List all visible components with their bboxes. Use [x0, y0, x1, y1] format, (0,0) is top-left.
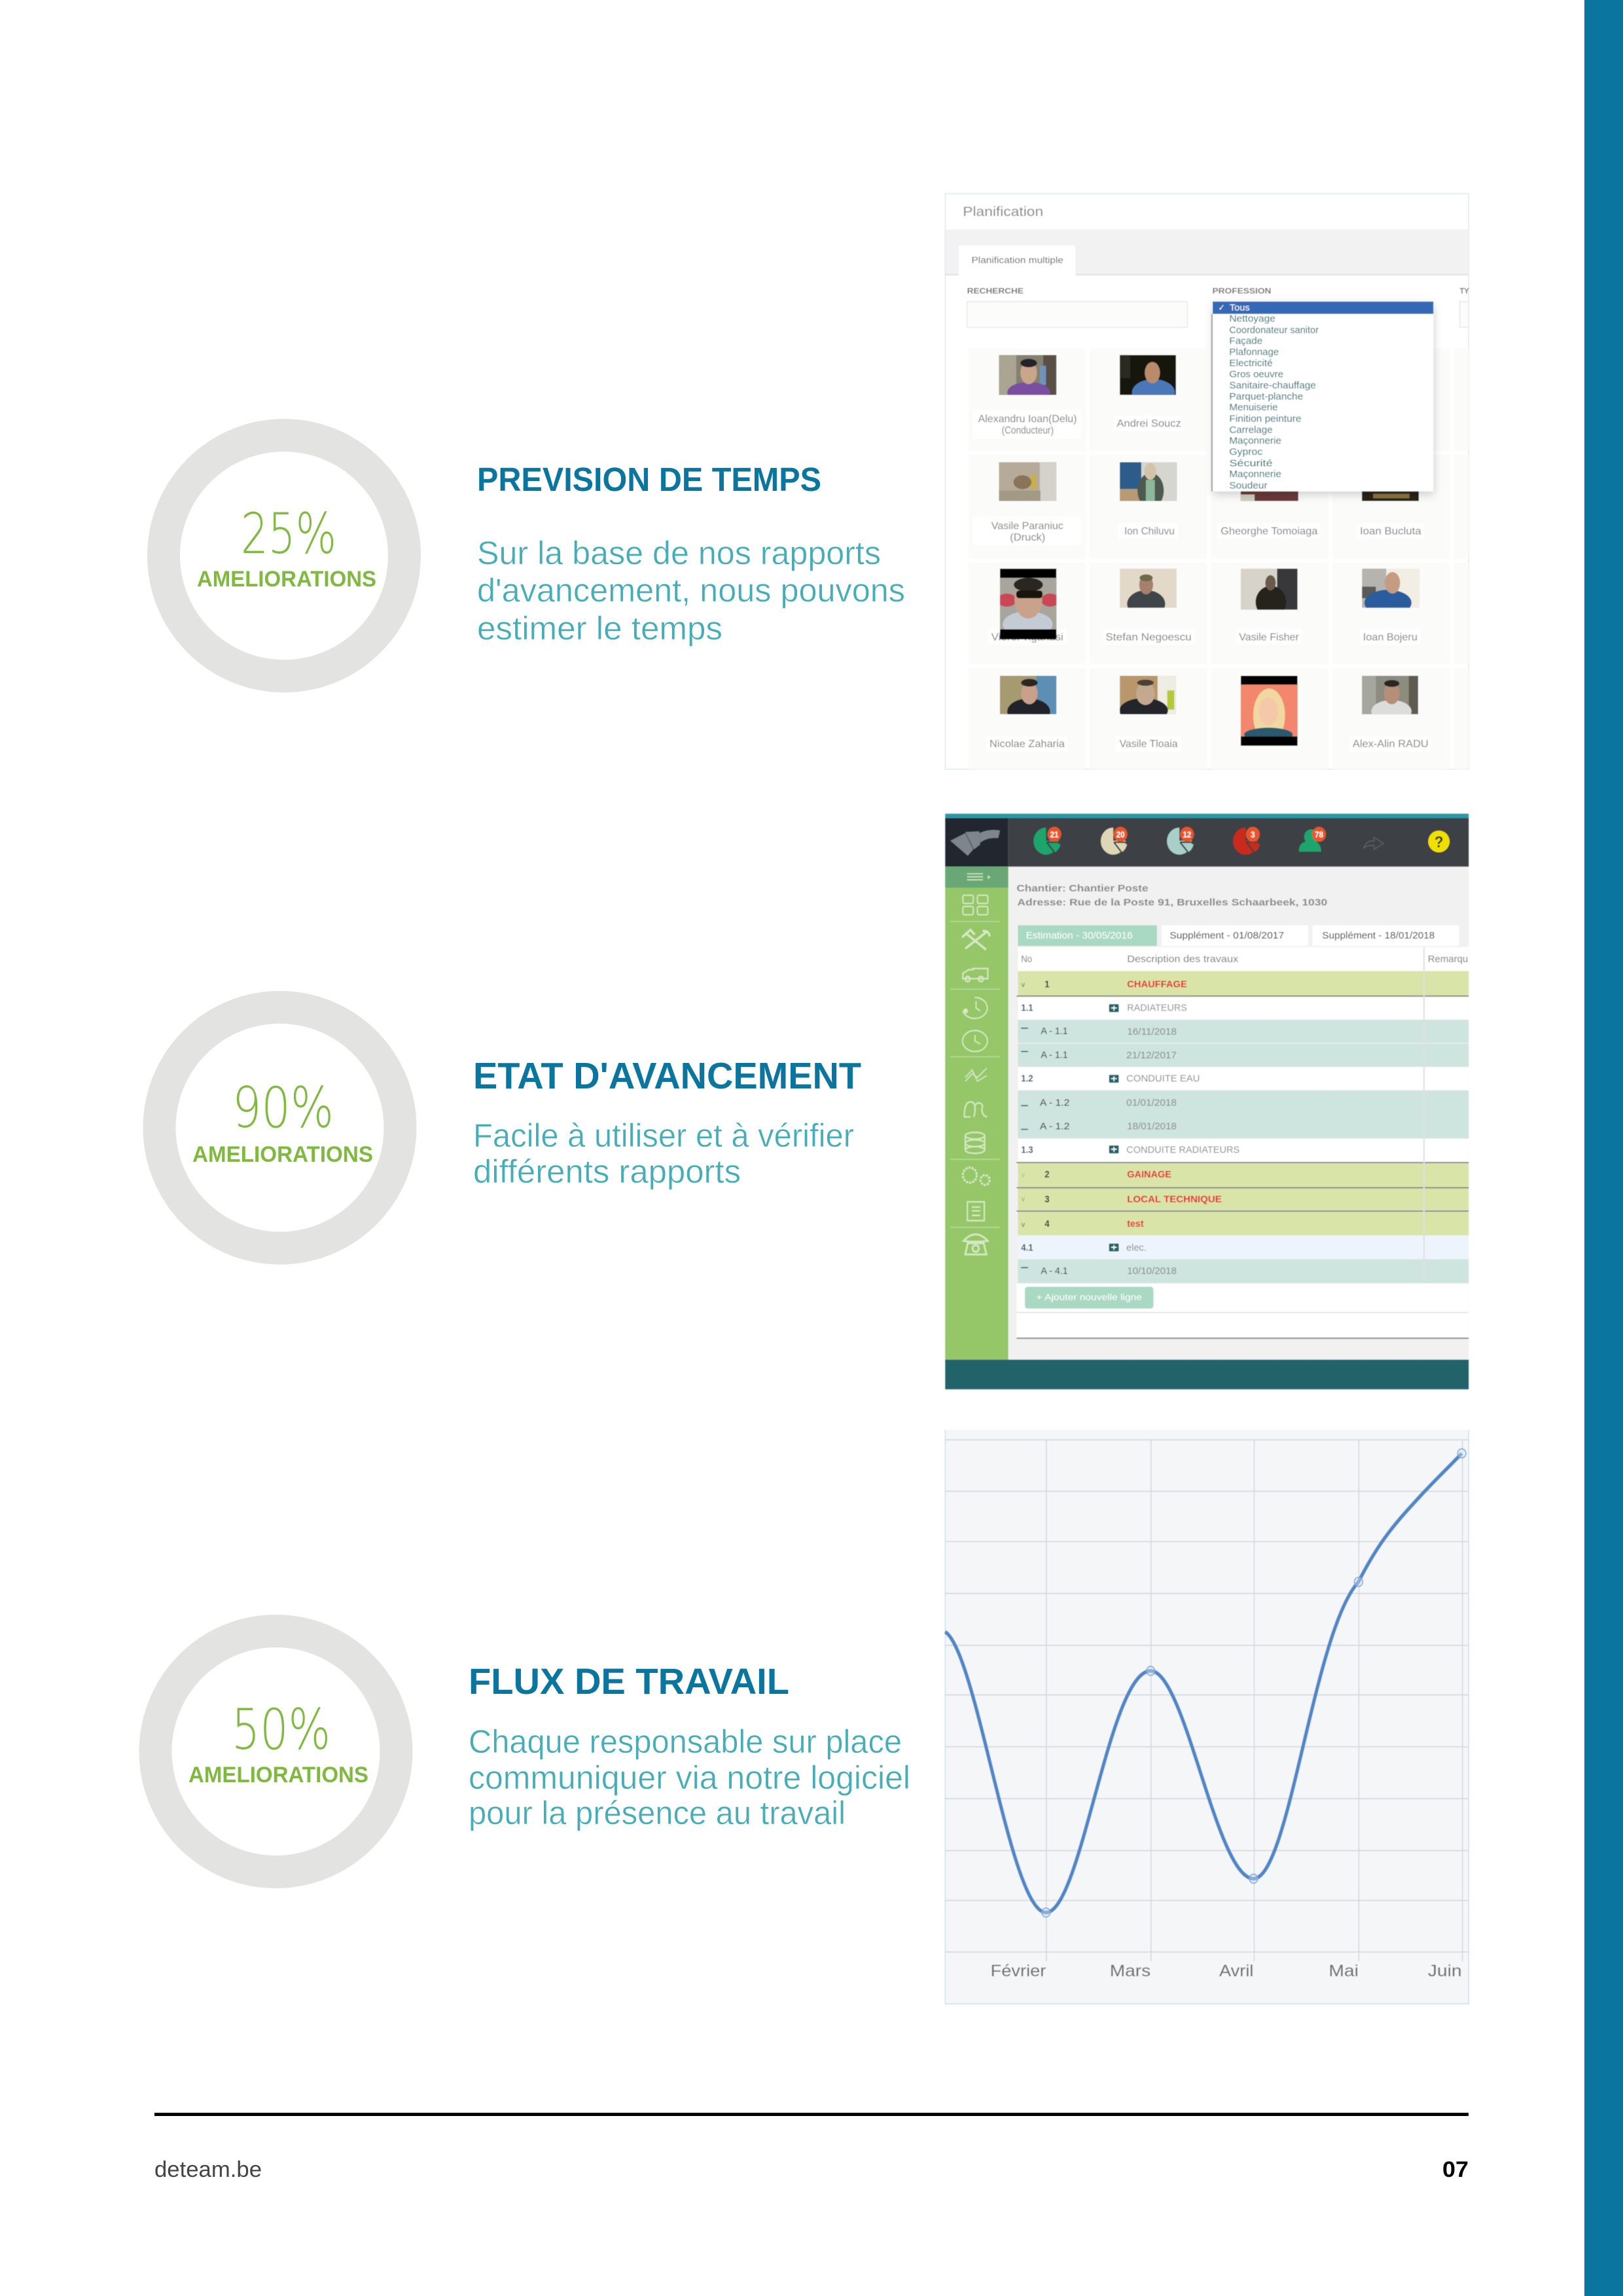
tabs: Estimation - 30/05/2016 — [1026, 930, 1133, 941]
employee cards grid — [969, 348, 1469, 769]
heading: etat d'avancement: ETAT D'AVANCEMENT — [473, 1055, 861, 1097]
site address: Adresse: Rue de la Poste 91, Bruxelles Schaarbeek, 1030 — [1017, 897, 1327, 908]
icon: red pie 3: 3 — [1251, 830, 1255, 839]
donut: 50% ameliorations: 50% — [232, 1697, 330, 1763]
text block: flux de travail: Chaque responsable sur place — [469, 1723, 902, 1760]
data points — [1042, 1449, 1466, 1917]
icon: line chart — [965, 1068, 987, 1081]
dropdown: profession list: Menuiserie — [1229, 401, 1278, 412]
name labels: Ion Chiluvu — [1124, 526, 1175, 537]
works table: 18/01/2018 — [1127, 1121, 1177, 1132]
dropdown: profession list: Soudeur — [1229, 480, 1268, 491]
panel: planification screenshot: Planification multiple — [972, 255, 1063, 265]
heading: prevision de temps: PREVISION DE TEMPS — [477, 461, 821, 498]
text block: flux de travail — [469, 1723, 910, 1831]
site address: Chantier: Chantier Poste — [1016, 884, 1149, 894]
works table: v — [1022, 1195, 1026, 1204]
left navigation rail — [945, 867, 1008, 1359]
icon: database — [965, 1132, 985, 1153]
works table: LOCAL TECHNIQUE — [1127, 1194, 1222, 1204]
panel: planification screenshot: TY — [1459, 287, 1469, 296]
donut: 25% ameliorations: AMELIORATIONS — [197, 567, 376, 592]
works table: 10/10/2018 — [1127, 1266, 1177, 1276]
x axis labels: Avril — [1219, 1962, 1253, 1981]
icon: routes — [964, 1102, 987, 1117]
works table: v — [1022, 1221, 1026, 1229]
donut: 90% ameliorations: 90% — [232, 1075, 334, 1141]
icon: truck — [963, 969, 988, 982]
works table: 1.3 — [1021, 1145, 1033, 1155]
x axis labels: Juin — [1428, 1962, 1462, 1981]
icon: help — [1428, 831, 1450, 852]
dropdown: profession list: Sécurité — [1229, 457, 1273, 469]
dropdown: profession list: Gyproc — [1229, 446, 1262, 457]
works table: No — [1021, 954, 1032, 964]
button: add new line — [1016, 1283, 1469, 1339]
tabs — [1018, 925, 1459, 946]
name labels: Nicolae Zaharia — [990, 738, 1065, 750]
works table: Remarqu — [1428, 954, 1468, 964]
app logo — [945, 818, 1008, 867]
panel: chantier table screenshot — [945, 814, 1469, 1390]
dropdown: profession list: Gros oeuvre — [1229, 368, 1283, 380]
name labels: Alex-Alin RADU — [1353, 738, 1429, 750]
dropdown: profession list: Carrelage — [1229, 424, 1273, 435]
employee photos — [997, 355, 1419, 745]
button: add new line: + Ajouter nouvelle ligne — [1037, 1292, 1142, 1302]
panel: planification screenshot: Planification — [963, 205, 1043, 219]
name labels: Andrei Soucz — [1116, 418, 1181, 429]
donut: 50% ameliorations — [156, 1631, 397, 1872]
dropdown: profession list: Coordonateur sanitor — [1229, 324, 1319, 335]
tabs: Supplément - 01/08/2017 — [1169, 930, 1284, 941]
dropdown: profession list: Maçonnerie — [1229, 435, 1281, 446]
name labels: Ioan Bojeru — [1363, 632, 1418, 643]
dropdown: profession list: Sanitaire-chauffage — [1229, 380, 1316, 391]
footer bar — [945, 1359, 1469, 1390]
donut: 90% ameliorations: AMELIORATIONS — [192, 1142, 373, 1167]
works table: A - 4.1 — [1041, 1266, 1068, 1276]
chart grid — [945, 1440, 1469, 1962]
x axis labels — [991, 1962, 1462, 1981]
data line — [945, 1454, 1462, 1912]
icon: gears — [963, 1168, 990, 1185]
text block: etat d'avancement — [473, 1117, 854, 1190]
works table: 3 — [1044, 1194, 1050, 1204]
dropdown: profession list: Electricité — [1229, 357, 1273, 368]
name labels: Vasile Fisher — [1239, 632, 1299, 643]
page number: 07 — [1442, 2157, 1469, 2182]
icon: history clock — [963, 997, 988, 1018]
site address — [1016, 884, 1327, 908]
dropdown: profession list: Parquet-planche — [1229, 391, 1303, 402]
icon: red pie 3 — [1233, 827, 1261, 855]
works table: v — [1022, 981, 1026, 989]
x axis labels: Mars — [1110, 1962, 1150, 1981]
works table: A - 1.2 — [1040, 1121, 1069, 1132]
donut: 25% ameliorations — [164, 435, 404, 676]
works table: 21/12/2017 — [1126, 1050, 1177, 1060]
icon: help: ? — [1435, 833, 1443, 850]
donut: 25% ameliorations: 25% — [241, 501, 336, 567]
section: flux de travail — [156, 1631, 910, 1872]
name labels: Vasile Paraniuc — [991, 520, 1063, 532]
dropdown: profession list: ✓ — [1218, 302, 1225, 312]
works table: CONDUITE EAU — [1126, 1073, 1200, 1084]
text block: etat d'avancement: Facile à utiliser et à vérifier — [473, 1117, 854, 1154]
text block: prevision de temps: estimer le temps — [477, 610, 722, 647]
icon: beige pie 20: 20 — [1116, 830, 1125, 839]
works table: elec. — [1126, 1242, 1147, 1253]
works table: CONDUITE RADIATEURS — [1126, 1145, 1240, 1155]
panel: line chart screenshot — [945, 1429, 1469, 2005]
works table: v — [1022, 1171, 1026, 1179]
dropdown: profession list: Façade — [1229, 335, 1262, 346]
panel: planification screenshot: RECHERCHE — [967, 287, 1024, 296]
name labels: (Druck) — [1010, 531, 1045, 543]
works table: A - 1.2 — [1040, 1098, 1069, 1107]
name labels: Alexandru Ioan(Delu) — [978, 413, 1077, 425]
donut: 50% ameliorations: AMELIORATIONS — [188, 1763, 368, 1787]
heading: flux de travail: FLUX DE TRAVAIL — [469, 1660, 789, 1702]
works table: 4.1 — [1021, 1242, 1033, 1253]
dropdown: profession list — [1211, 302, 1433, 492]
works table: test — [1127, 1219, 1144, 1229]
icon: tools — [962, 930, 990, 950]
name labels: Gheorghe Tomoiaga — [1221, 526, 1318, 537]
name labels — [973, 410, 1431, 752]
works table: 1.1 — [1021, 1003, 1033, 1013]
icon: green pie 21 — [1033, 827, 1062, 855]
x axis labels: Février — [991, 1962, 1046, 1981]
text block: flux de travail: communiquer via notre logiciel — [469, 1759, 910, 1796]
icon: telephone — [963, 1234, 988, 1255]
icon: share arrow — [1363, 837, 1383, 850]
text block: flux de travail: pour la présence au travail — [469, 1795, 846, 1831]
website: deteam.be — [154, 2157, 262, 2182]
top bar status icons — [1033, 827, 1450, 855]
icon: green pie 21: 21 — [1050, 830, 1059, 839]
icon: green users 78 — [1299, 827, 1326, 852]
dropdown: profession list: Maçonnerie — [1229, 468, 1281, 479]
name labels: Stefan Negoescu — [1105, 632, 1192, 643]
works table: 1 — [1044, 979, 1050, 990]
works table: 01/01/2018 — [1126, 1098, 1177, 1107]
icon: clock — [963, 1030, 988, 1052]
panel: planification screenshot — [945, 194, 1469, 769]
name labels: (Conducteur) — [1002, 425, 1054, 437]
works table: A - 1.1 — [1041, 1026, 1068, 1036]
icon: teal pie 12: 12 — [1183, 830, 1192, 839]
name labels: Viorel Tiganasi — [991, 632, 1063, 643]
text block: prevision de temps: d'avancement, nous pouvons — [477, 572, 905, 609]
footer — [154, 2113, 1469, 2182]
works table: 16/11/2018 — [1127, 1026, 1177, 1037]
text block: etat d'avancement: différents rapports — [473, 1153, 741, 1190]
works table: Description des travaux — [1127, 954, 1238, 964]
dropdown: profession list: Finition peinture — [1229, 413, 1302, 424]
right sidebar band — [1584, 0, 1623, 2296]
dropdown: profession list: Nettoyage — [1229, 313, 1275, 323]
section: prevision de temps — [164, 435, 905, 676]
works table: 1.2 — [1021, 1073, 1033, 1084]
text block: prevision de temps — [477, 535, 905, 647]
panel: planification screenshot: PROFESSION — [1212, 287, 1271, 296]
works table: CHAUFFAGE — [1127, 979, 1187, 990]
tabs: Supplément - 18/01/2018 — [1322, 930, 1435, 941]
icon: beige pie 20 — [1101, 827, 1128, 855]
name labels: Ioan Bucluta — [1360, 526, 1421, 537]
works table — [1016, 947, 1469, 1283]
works table: GAINAGE — [1127, 1169, 1171, 1179]
x axis labels: Mai — [1329, 1962, 1359, 1981]
dropdown: profession list: Tous — [1230, 302, 1250, 312]
icon: document — [967, 1202, 984, 1221]
works table: RADIATEURS — [1127, 1003, 1187, 1013]
icon: green users 78: 78 — [1315, 830, 1323, 839]
works table: A - 1.1 — [1041, 1050, 1068, 1060]
partly hidden photos under the dropdown — [1241, 487, 1419, 501]
icon: grid — [963, 895, 988, 915]
icon: teal pie 12 — [1167, 827, 1195, 855]
text block: prevision de temps: Sur la base de nos rapports — [477, 535, 881, 571]
works table: 2 — [1044, 1169, 1050, 1179]
dropdown: profession list: Plafonnage — [1229, 346, 1279, 357]
section: etat d'avancement — [160, 1007, 861, 1248]
name labels: Vasile Tloaia — [1120, 738, 1178, 750]
works table: 4 — [1044, 1219, 1050, 1229]
donut: 90% ameliorations — [160, 1007, 401, 1248]
